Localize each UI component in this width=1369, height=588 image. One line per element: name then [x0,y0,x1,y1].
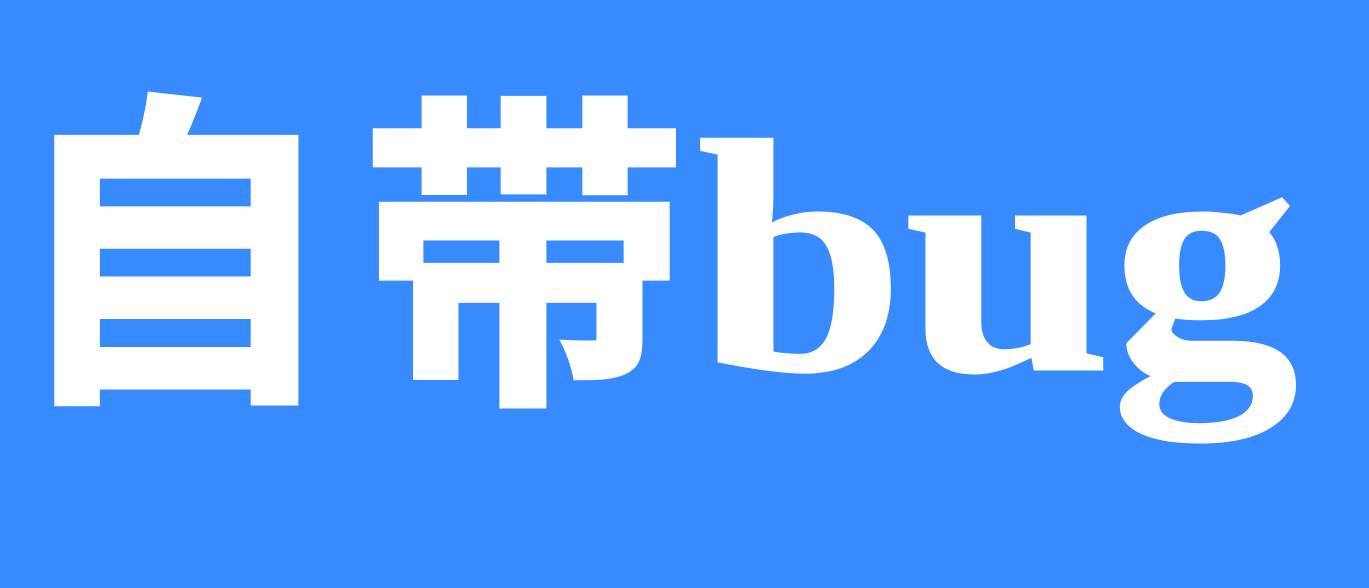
character: 带: 带 [360,0,688,471]
title: 自带bug [10,0,1298,471]
word: bug: bug [697,75,1298,447]
character: 自: 自 [10,0,338,469]
